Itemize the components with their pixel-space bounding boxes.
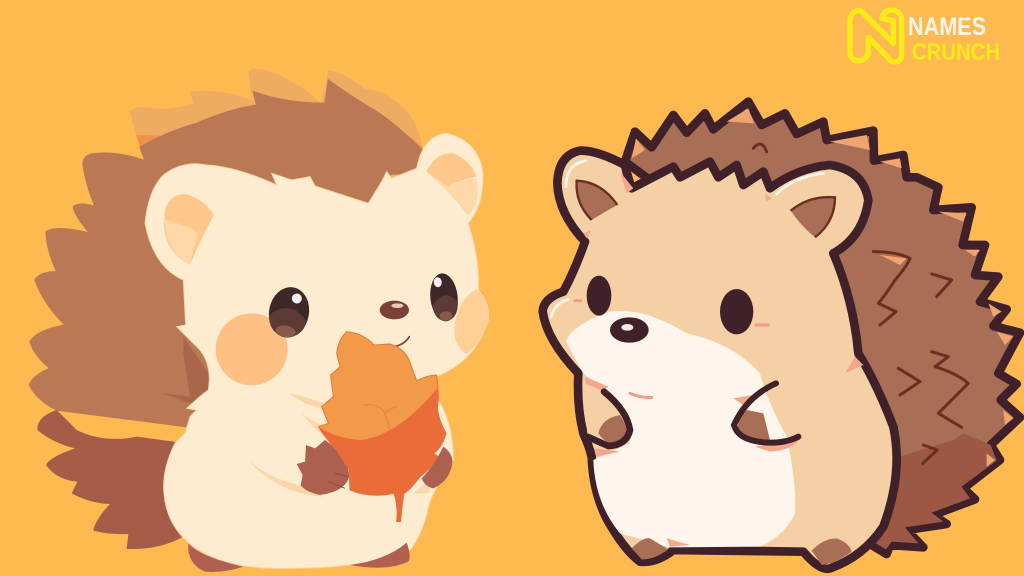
left ear inner — [164, 194, 214, 265]
spine marks — [753, 144, 968, 463]
spine highlights — [632, 108, 1013, 467]
ear right inner — [791, 197, 835, 237]
logo text: NAMES: NAMES — [908, 13, 986, 41]
cheek right — [454, 289, 489, 354]
left eye — [587, 276, 611, 316]
spine tips: light top spines — [130, 69, 423, 160]
paw right — [422, 447, 452, 488]
spines: brown outlined fan — [625, 102, 1020, 554]
left eye — [265, 284, 313, 341]
logo — [850, 10, 1000, 66]
spines: shadow under cheek — [163, 337, 215, 403]
left arm — [585, 383, 630, 445]
illustration: outlined tan hedgehog — [543, 102, 1020, 569]
paw left — [297, 440, 349, 495]
nose — [610, 317, 649, 343]
spine tips: orange accent — [136, 135, 423, 153]
body and head — [543, 151, 897, 569]
leaf — [318, 332, 446, 522]
left paw pad — [587, 392, 630, 446]
right paw — [734, 383, 798, 443]
left foot — [632, 538, 668, 559]
right eye — [720, 289, 753, 334]
arm shadows — [248, 393, 433, 497]
foot right — [350, 543, 410, 568]
right ear inner — [426, 153, 478, 216]
pink shading — [583, 172, 863, 547]
spines: darker lower section — [870, 433, 997, 549]
mouth — [388, 337, 409, 347]
body and head — [145, 133, 489, 568]
nose — [380, 301, 409, 319]
logo icon: N mark — [850, 10, 902, 62]
white rim highlights — [551, 161, 823, 317]
foot left — [188, 543, 243, 572]
ear left inner — [577, 181, 617, 220]
logo text: CRUNCH: CRUNCH — [912, 39, 1000, 66]
right eye — [428, 272, 460, 323]
spines: lower dark brown — [37, 410, 187, 549]
spines: main brown — [29, 80, 424, 427]
illustration: cream hedgehog holding a leaf — [29, 69, 489, 572]
right foot — [812, 538, 852, 565]
blush marks — [575, 301, 768, 397]
cheek left — [216, 313, 288, 385]
belly — [566, 311, 795, 547]
